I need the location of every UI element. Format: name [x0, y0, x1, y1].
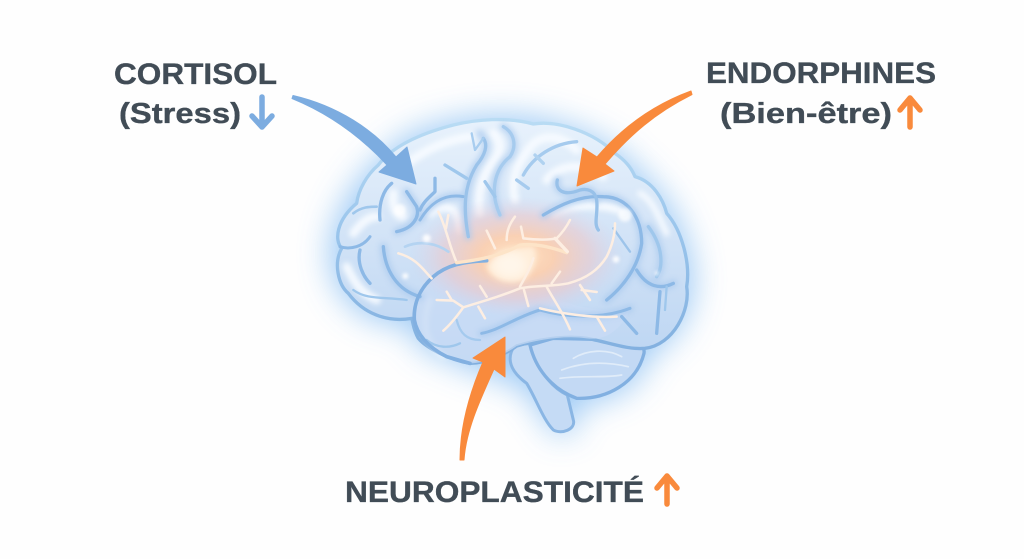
- gyri white highlights: [347, 133, 667, 357]
- icon: up arrow: [900, 98, 920, 127]
- label: endorphins: [706, 57, 936, 130]
- icon: up arrow: [657, 476, 677, 504]
- label: cortisol: (Stress): [119, 98, 241, 130]
- sulci: soft shadow: [383, 127, 673, 333]
- cerebellum folds: [560, 351, 628, 378]
- temporal lobe boundary: [414, 261, 487, 363]
- icon: down arrow: [252, 97, 272, 127]
- arrow: endorphins to brain: [577, 91, 692, 186]
- label: cortisol: CORTISOL: [114, 58, 277, 91]
- label: endorphins: ENDORPHINES: [706, 57, 936, 90]
- arrow: cortisol to brain: [292, 96, 416, 184]
- temporal lobe: [414, 260, 630, 363]
- central orange glow: [410, 197, 623, 317]
- label: cortisol: [114, 58, 277, 130]
- sparkle highlights: [394, 204, 659, 279]
- label: endorphins: (Bien-être): [720, 98, 892, 130]
- brain illustration: [335, 120, 688, 432]
- glowing neural branches: [398, 212, 617, 331]
- sulci: [340, 127, 673, 347]
- brain stem: [510, 343, 574, 432]
- cerebellum: [530, 338, 644, 398]
- blue glow behind brain: [335, 120, 688, 432]
- label: neuroplasticity: NEUROPLASTICITÉ: [345, 475, 644, 509]
- cerebrum outline: [337, 120, 688, 363]
- arrow: neuroplasticity to brain: [460, 337, 505, 460]
